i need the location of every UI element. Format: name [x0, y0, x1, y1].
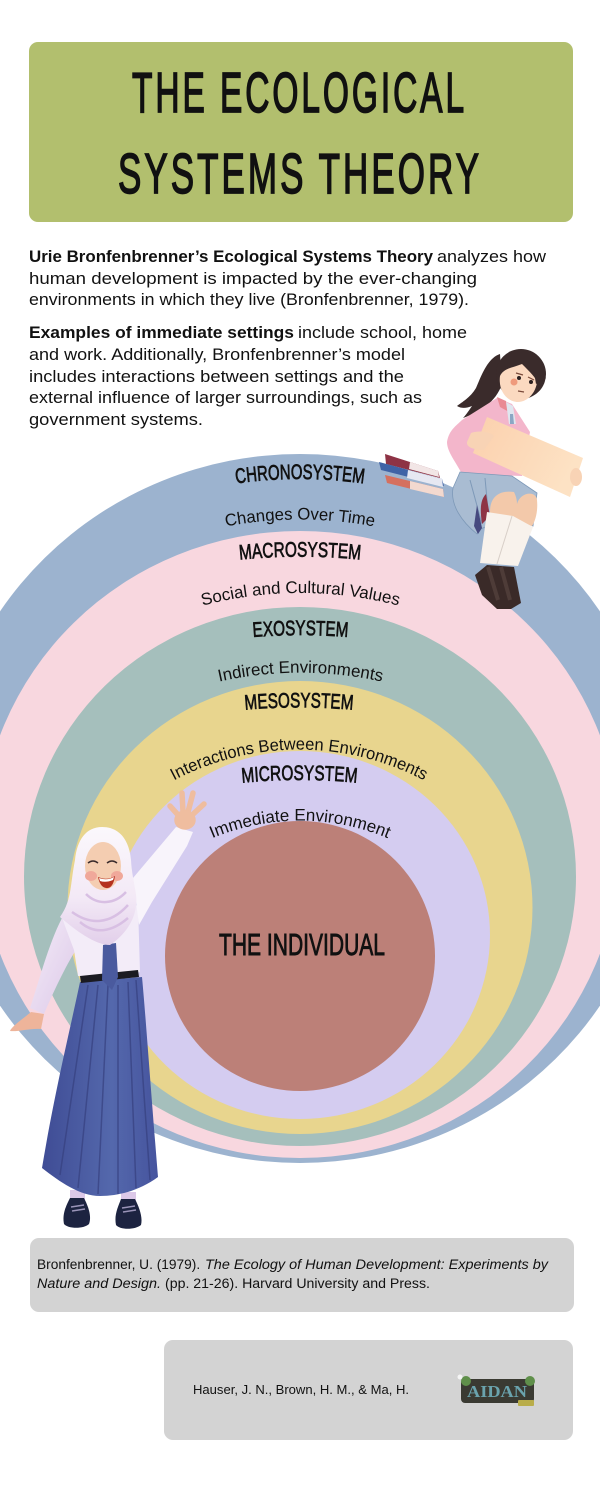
- reference panel: Bronfenbrenner: Nature and Design.: [37, 1276, 161, 1291]
- ring: microsystem: [110, 751, 490, 1119]
- illustration: seated girl with board: [447, 349, 583, 609]
- label: macrosystem: MACROSYSTEM: [239, 542, 361, 560]
- label: immediate environment: Immediate Environment: [209, 809, 391, 838]
- intro paragraph: Urie Bronfenbrenner’s Ecological Systems Theory: [29, 247, 434, 266]
- boots: [475, 565, 521, 609]
- ring: chronosystem: [0, 454, 600, 1163]
- mouth: [98, 876, 115, 888]
- sweater: [447, 398, 530, 476]
- raised hand: [170, 793, 204, 827]
- hands: [467, 432, 494, 450]
- intro paragraph: environments in which they live (Bronfenbrenner, 1979).: [29, 290, 469, 309]
- label: social and cultural values: Social and Cultural Values: [202, 580, 400, 605]
- examples paragraph: include school, home: [298, 323, 467, 342]
- illustration: waving girl in hijab: [10, 793, 204, 1229]
- examples paragraph: and work. Additionally, Bronfenbrenner’s model: [29, 345, 405, 364]
- icon: AIDAN logo: [458, 1374, 535, 1406]
- label: indirect environments: Indirect Environments: [218, 660, 383, 682]
- tie: [102, 943, 118, 990]
- skirt pleats: [60, 980, 150, 1194]
- skirt: [453, 472, 537, 534]
- shoes: [63, 1198, 90, 1228]
- skirt: [42, 977, 158, 1196]
- label: chronosystem: CHRONOSYSTEM: [236, 464, 365, 484]
- reference panel: Bronfenbrenner: [30, 1238, 574, 1312]
- examples paragraph: [29, 323, 467, 429]
- examples paragraph: government systems.: [29, 410, 203, 429]
- examples paragraph: includes interactions between settings and the: [29, 367, 404, 386]
- reference panel: Hauser: Hauser, J. N., Brown, H. M., & Ma, H.: [193, 1382, 409, 1397]
- socks: [480, 512, 533, 566]
- icon: stack of books: [379, 454, 444, 497]
- hair: [496, 349, 546, 399]
- label: mesosystem: MESOSYSTEM: [244, 692, 354, 710]
- ponytail: [457, 354, 502, 418]
- ring: mesosystem: [68, 681, 532, 1134]
- examples paragraph: external influence of larger surroundings, such as: [29, 388, 422, 407]
- raised sleeve: [133, 827, 193, 925]
- face: [500, 364, 537, 402]
- intro paragraph: human development is impacted by the ever-changing: [29, 269, 477, 288]
- left sleeve: [30, 918, 76, 1014]
- hijab: [60, 827, 136, 945]
- examples paragraph: Examples of immediate settings: [29, 323, 294, 342]
- nested circle diagram: [0, 454, 600, 1163]
- reference panel: Bronfenbrenner: The Ecology of Human Development: Experiments by: [205, 1257, 549, 1272]
- board: [473, 417, 583, 497]
- label: interactions between environments: Interactions Between Environments: [170, 739, 427, 780]
- label: exosystem: EXOSYSTEM: [252, 620, 348, 638]
- reference panel: Bronfenbrenner: Bronfenbrenner, U. (1979).: [37, 1257, 204, 1272]
- intro paragraph: analyzes how: [437, 247, 547, 266]
- icon: AIDAN logo: AIDAN: [467, 1382, 528, 1401]
- label: the individual: THE INDIVIDUAL: [219, 927, 385, 962]
- ring: macrosystem: [0, 531, 600, 1158]
- label: changes over time: Changes Over Time: [226, 508, 374, 526]
- intro paragraph: [29, 247, 547, 309]
- reference panel: Hauser: [164, 1340, 573, 1440]
- belt: [80, 970, 139, 983]
- reference panel: Bronfenbrenner: (pp. 21-26). Harvard University and Press.: [165, 1276, 430, 1291]
- socks: [70, 1190, 85, 1202]
- lower hand: [10, 1012, 44, 1031]
- ring: exosystem: [24, 607, 576, 1146]
- knees: [490, 492, 537, 526]
- label: microsystem: MICROSYSTEM: [242, 765, 358, 783]
- blouse: [62, 905, 140, 977]
- face: [85, 842, 121, 890]
- title panel: [29, 42, 573, 222]
- circle: the individual: [165, 821, 435, 1091]
